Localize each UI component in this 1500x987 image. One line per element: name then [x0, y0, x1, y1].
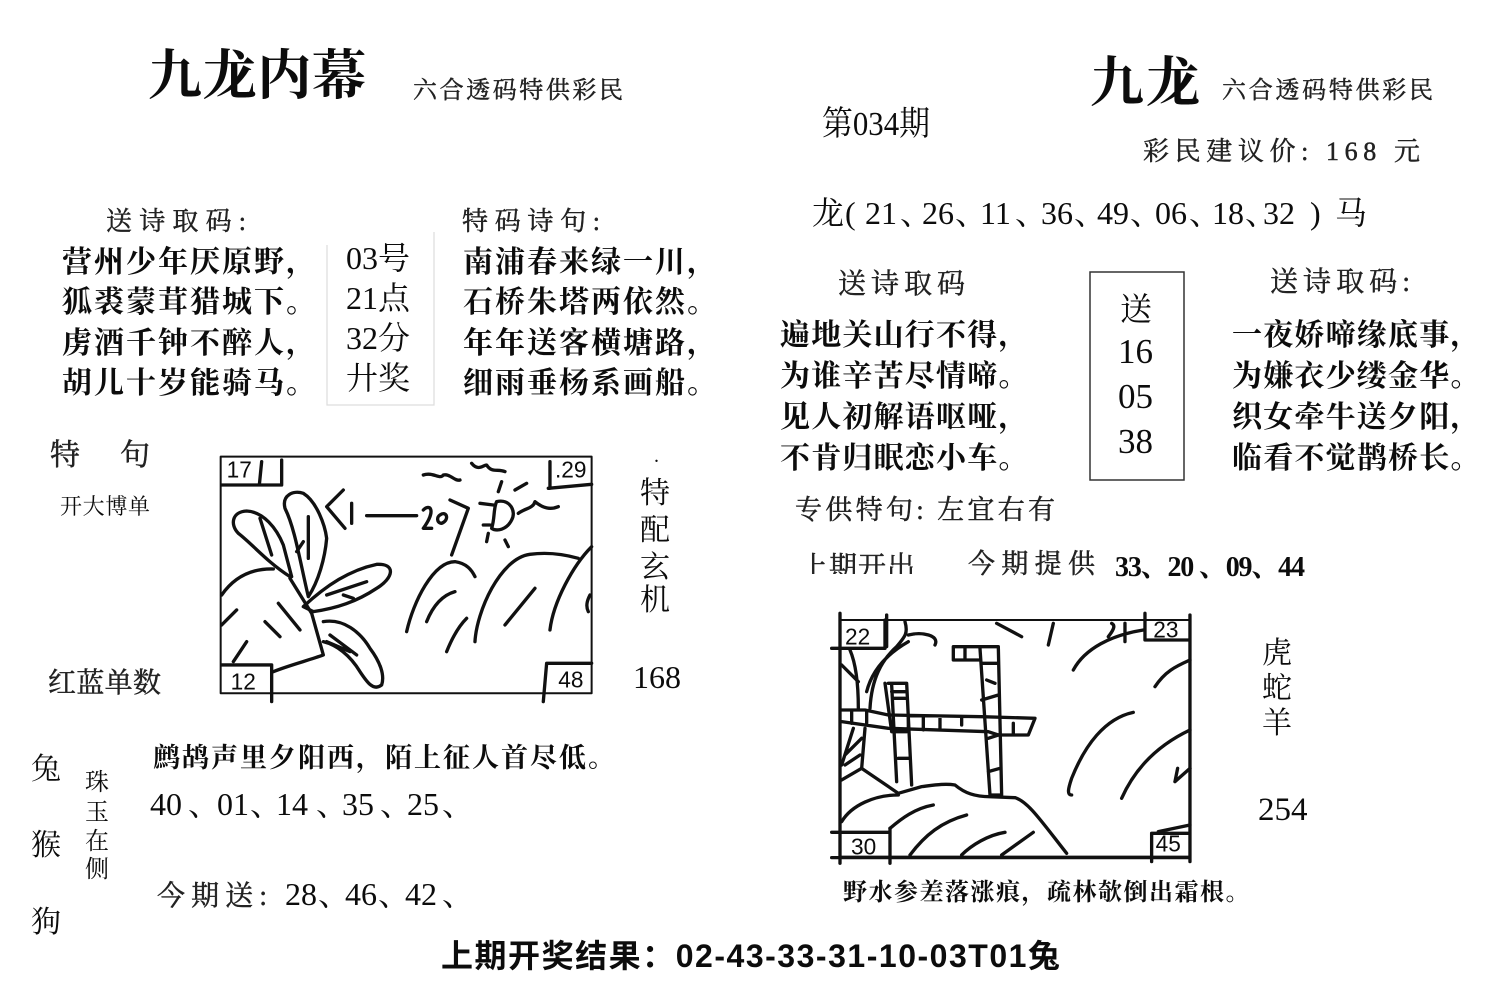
vertical label: beads: 珠: [85, 769, 109, 796]
sketch: bridge and hills: 30: [851, 833, 876, 859]
numbers left: [150, 786, 474, 822]
this issue send: 42: [405, 876, 437, 912]
numbers left: 40: [150, 786, 182, 822]
box: send numbers: 送: [1120, 291, 1152, 327]
poem: right: 年年送客横塘路，: [463, 327, 719, 361]
poem: right left: [780, 319, 1030, 475]
numbers left: 01: [217, 786, 249, 822]
numbers banner right: 龙: [812, 195, 844, 231]
special sentence: 专供特句: 左宜右有: [795, 495, 1055, 525]
sketch: leaves and sun: 12: [231, 668, 256, 694]
box: send numbers: 16: [1118, 332, 1153, 371]
numbers banner right: 06: [1155, 195, 1187, 231]
this issue offer: [968, 549, 1305, 583]
numbers banner right: 、: [1245, 195, 1277, 231]
poem line left: 鹧鸪声里夕阳西，陌上征人首尽低。: [153, 743, 617, 774]
numbers banner right: 、: [1015, 195, 1047, 231]
poem: right right: [1232, 318, 1482, 475]
poem: right left: 遍地关山行不得，: [780, 319, 1030, 353]
this issue send: [157, 876, 474, 912]
poem: right right: 临看不觉鹊桥长。: [1232, 442, 1482, 475]
right subtitle: 六合透码特供彩民: [1222, 77, 1433, 104]
numbers left: 、: [188, 786, 220, 822]
box: send numbers: [1090, 272, 1184, 480]
sketch: bridge and hills: 22: [845, 623, 870, 649]
numbers left: 、: [316, 786, 348, 822]
this issue offer: 今期提供: [968, 549, 1096, 579]
number 254: 254: [1258, 792, 1308, 828]
issue number: 第034期: [822, 105, 930, 143]
numbers banner right: 、: [955, 195, 987, 231]
vertical label: special: 玄: [640, 551, 670, 584]
zodiac column left: 兔: [31, 753, 61, 786]
zodiac column right: [1262, 637, 1292, 740]
zodiac column right: 虎: [1262, 637, 1292, 670]
poem: right right: 织女牵牛送夕阳，: [1232, 401, 1482, 435]
poem: right: 细雨垂杨系画船。: [463, 367, 719, 400]
numbers banner right: 马: [1335, 195, 1367, 231]
this issue send: 28: [285, 876, 317, 912]
poem: right left: 见人初解语呕哑，: [780, 401, 1030, 435]
poem: right right: 为嫌衣少缕金华。: [1232, 360, 1482, 393]
poem line right: 野水参差落涨痕，疏林欹倒出霜根。: [843, 879, 1251, 906]
left subtitle: 六合透码特供彩民: [413, 77, 623, 104]
sketch: leaves and sun: 48: [558, 667, 584, 693]
text: open big: 开大博单: [60, 494, 150, 519]
numbers banner right: 26: [922, 195, 954, 231]
special line label: 特 句: [50, 439, 150, 472]
numbers banner right: (: [845, 195, 856, 231]
poem: right: 南浦春来绿一川，: [463, 246, 719, 280]
this issue send: 今期送:: [157, 880, 267, 912]
last issue clipped: 上期开出: [800, 551, 915, 583]
sketch: bridge and hills: 45: [1156, 831, 1181, 857]
numbers banner right: 、: [1074, 195, 1106, 231]
price: 彩民建议价: 168 元: [1143, 137, 1420, 166]
numbers banner right: 、: [1130, 195, 1162, 231]
poem: left: [62, 246, 318, 400]
heading: send poem left: 送诗取码: [838, 268, 965, 300]
vertical label: special: 配: [640, 514, 670, 547]
box: send numbers: 38: [1118, 422, 1153, 461]
left title: 九龙内幕: [148, 46, 366, 106]
vertical label: special: [640, 445, 670, 617]
numbers banner right: 、: [900, 195, 932, 231]
this issue send: 、: [442, 876, 474, 912]
number 168: 168: [633, 659, 681, 695]
box: draw time: 32分: [346, 320, 410, 356]
zodiac column right: 蛇: [1262, 672, 1292, 705]
numbers left: 14: [276, 786, 308, 822]
numbers banner right: 32: [1263, 195, 1295, 231]
sketch: leaves and sun: 17: [227, 457, 252, 483]
vertical label: special: 机: [640, 584, 670, 617]
poem: right: [463, 246, 719, 400]
vertical label: beads: 玉: [85, 800, 109, 826]
zodiac column left: [31, 753, 61, 939]
poem: left: 营州少年厌原野，: [62, 246, 318, 280]
numbers left: 、: [442, 786, 474, 822]
sketch: leaves and sun: .29: [555, 457, 586, 483]
zodiac column left: 猴: [31, 829, 61, 862]
box: draw time: 21点: [346, 280, 411, 316]
this issue send: 、: [378, 876, 410, 912]
poem: right left: 不肯归眠恋小车。: [780, 442, 1030, 475]
heading: send poem: 送诗取码:: [106, 207, 246, 236]
zodiac column right: 羊: [1262, 707, 1292, 740]
this issue offer: 33、20 、09、44: [1115, 552, 1305, 583]
sketch: bridge and hills: [832, 613, 1190, 863]
zodiac column left: 狗: [31, 906, 61, 939]
numbers banner right: ): [1310, 195, 1321, 231]
sketch: bridge and hills: 23: [1153, 617, 1179, 643]
numbers banner right: 、: [1189, 195, 1221, 231]
poem: left: 虏酒千钟不醉人，: [62, 327, 318, 361]
numbers left: 35: [342, 786, 374, 822]
numbers banner right: 18: [1212, 195, 1244, 231]
this issue send: 、: [318, 876, 350, 912]
heading: special poem: 特码诗句:: [462, 207, 600, 236]
numbers left: 、: [380, 786, 412, 822]
box: draw time: [327, 232, 434, 405]
box: draw time: 廾奖: [346, 360, 410, 396]
poem: right left: 为谁辛苦尽情啼。: [780, 360, 1030, 393]
text: red blue odd: 红蓝单数: [48, 667, 161, 699]
this issue send: 46: [345, 876, 377, 912]
vertical label: special: .: [654, 445, 659, 467]
poem: left: 胡儿十岁能骑马。: [62, 367, 318, 400]
right title: 九龙: [1090, 53, 1200, 113]
numbers banner right: 36: [1041, 195, 1073, 231]
vertical label: beads: 在: [85, 828, 109, 855]
numbers left: 、: [250, 786, 282, 822]
box: draw time: 03号: [346, 240, 410, 276]
numbers banner right: [812, 195, 1367, 231]
last results banner: 上期开奖结果：02-43-33-31-10-03T01兔: [441, 938, 1060, 974]
box: send numbers: 05: [1118, 377, 1153, 416]
panel: left poems: [62, 207, 719, 405]
heading: send poem right: 送诗取码:: [1270, 266, 1410, 298]
sketch: leaves and sun: [221, 457, 592, 702]
poem: right: 石桥朱塔两依然。: [463, 286, 719, 319]
numbers left: 25: [407, 786, 439, 822]
numbers banner right: 49: [1097, 195, 1129, 231]
numbers banner right: 21: [865, 195, 897, 231]
poem: left: 狐裘蒙茸猎城下。: [62, 286, 318, 319]
panel: right poems: [780, 266, 1482, 480]
poem: right right: 一夜娇啼缘底事，: [1232, 318, 1482, 353]
vertical label: special: 特: [640, 477, 670, 510]
vertical label: beads: 侧: [85, 856, 109, 883]
numbers banner right: 11: [980, 195, 1011, 231]
vertical label: beads: [85, 769, 109, 883]
